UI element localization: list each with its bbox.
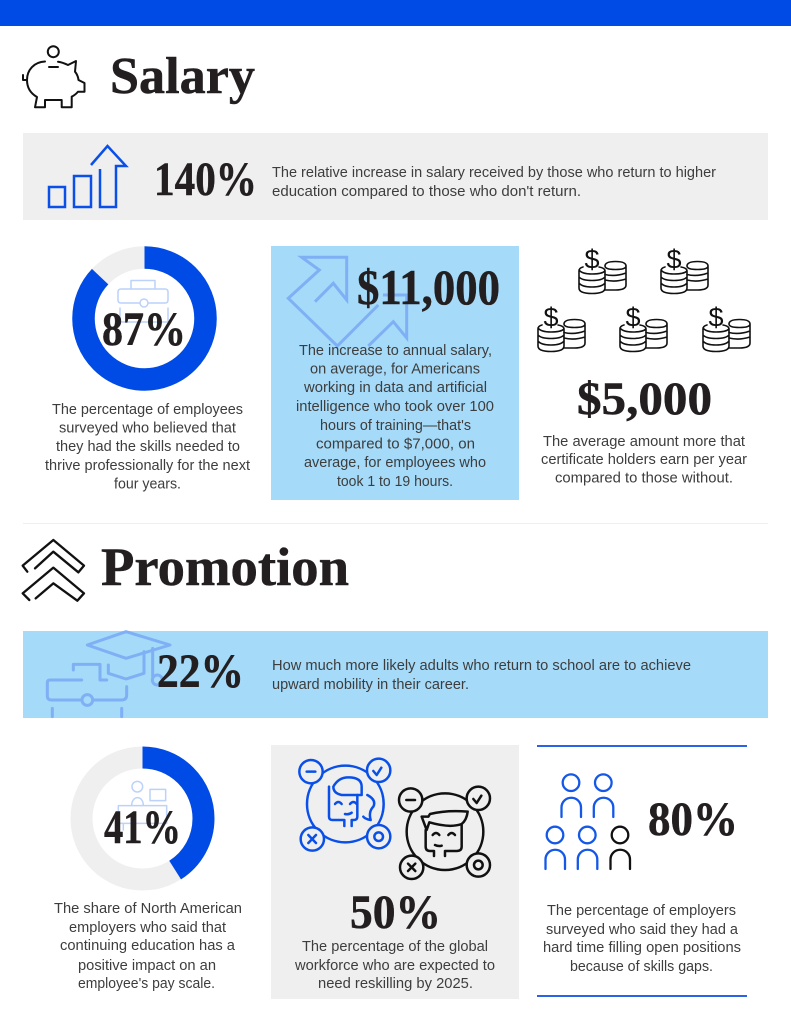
stat: 22%: 22% [157, 645, 244, 698]
icon: double chevron [23, 540, 84, 601]
text: 80% description: surveyed who said they had a [546, 922, 739, 938]
text: $11,000 description: working in data and artificial [303, 380, 487, 396]
text: 41% description: The share of North American [54, 901, 242, 917]
text: $11,000 description: average, for employees who [304, 455, 486, 471]
text: $11,000 description: intelligence who took over 100 [296, 399, 494, 415]
text: 22% description: upward mobility in their career. [272, 677, 469, 693]
text: 41% description: positive impact on an [78, 958, 216, 974]
icon: coin stacks: $ [625, 302, 641, 332]
text: 50% description: The percentage of the global [302, 939, 488, 955]
text: $11,000 description: on average, for Americans [310, 362, 480, 378]
text: $11,000 description [296, 343, 494, 490]
text: 80% description: The percentage of employers [547, 903, 736, 919]
panel: 80% [537, 745, 747, 997]
donut chart: 87% [84, 258, 206, 380]
panel: 50% card [271, 745, 519, 999]
icon: reskilling faces [299, 759, 490, 879]
text: 41% description: employee's pay scale. [78, 976, 215, 992]
panel: 140% band [23, 133, 768, 220]
text: 87% description: thrive professionally for the next [45, 458, 250, 474]
text: 140% description: education compared to those who don't return. [272, 184, 581, 200]
text: $11,000 description: took 1 to 19 hours. [337, 474, 453, 490]
text: 87% description [45, 402, 250, 492]
text: 41% description [54, 901, 242, 992]
stat: $5,000: $5,000 [577, 373, 712, 425]
text: 50% description: need reskilling by 2025. [318, 976, 473, 992]
panel: 22% band [23, 631, 768, 718]
icon: person at desk watermark [118, 781, 167, 830]
stat: 50%: 50% [350, 886, 441, 939]
icon: briefcase watermark [118, 280, 168, 322]
stat: 140%: 140% [154, 153, 257, 206]
text: $5,000 description [541, 434, 747, 486]
text: 41% description: employers who said that [69, 920, 226, 936]
text: 87% description: The percentage of employees [52, 402, 243, 418]
text: 80% description [543, 903, 741, 975]
icon: coin stacks: $ [543, 302, 559, 332]
text: 87% description: they had the skills needed to [56, 439, 240, 455]
text: $11,000 description: compared to $7,000, on [316, 436, 475, 452]
text: 50% description: workforce who are expected to [294, 958, 495, 974]
icon: coin stacks: $ [584, 244, 600, 274]
panel: 41% donut [54, 758, 242, 992]
icon: rising bars arrow [49, 146, 126, 207]
text: 41% description: continuing education has a [60, 938, 236, 954]
stat: 80%: 80% [648, 793, 738, 846]
stat: $11,000: $11,000 [357, 259, 500, 315]
icon: arrows watermark [288, 257, 407, 346]
text: 140% description [272, 165, 716, 200]
icon: piggy bank [23, 46, 84, 107]
stat: 87%: 87% [102, 303, 186, 356]
heading: Promotion: Promotion [101, 537, 349, 597]
icon: people group [546, 774, 630, 869]
text: 80% description: because of skills gaps. [570, 959, 713, 975]
heading: Salary: Salary [110, 48, 255, 105]
icon: coin stacks [538, 244, 750, 352]
text: $5,000 description: certificate holders earn per year [541, 452, 747, 468]
text: 22% description: How much more likely adults who return to school are to achieve [272, 658, 691, 674]
top bar [0, 0, 791, 26]
text: 87% description: four years. [114, 476, 181, 492]
icon: coin stacks: $ [666, 244, 682, 274]
text: 80% description: hard time filling open positions [543, 940, 741, 956]
stat: 41%: 41% [104, 801, 181, 854]
text: $11,000 description: hours of training—that's [320, 418, 471, 434]
text: $11,000 description: The increase to annual salary, [299, 343, 492, 359]
text: 50% description [294, 939, 495, 992]
donut chart: 41% [82, 758, 204, 880]
text: 140% description: The relative increase in salary received by those who return to higher [272, 165, 716, 181]
text: 87% description: surveyed who believed that [59, 420, 236, 436]
icon: graduation cap and briefcase watermark [47, 632, 170, 717]
panel: 87% donut [45, 258, 250, 492]
text: 22% description [272, 658, 691, 693]
icon: coin stacks: $ [708, 302, 724, 332]
panel: $11,000 card [271, 246, 519, 500]
panel: $5,000 [538, 244, 750, 486]
text: $5,000 description: The average amount more that [543, 434, 745, 450]
text: $5,000 description: compared to those without. [555, 470, 733, 486]
